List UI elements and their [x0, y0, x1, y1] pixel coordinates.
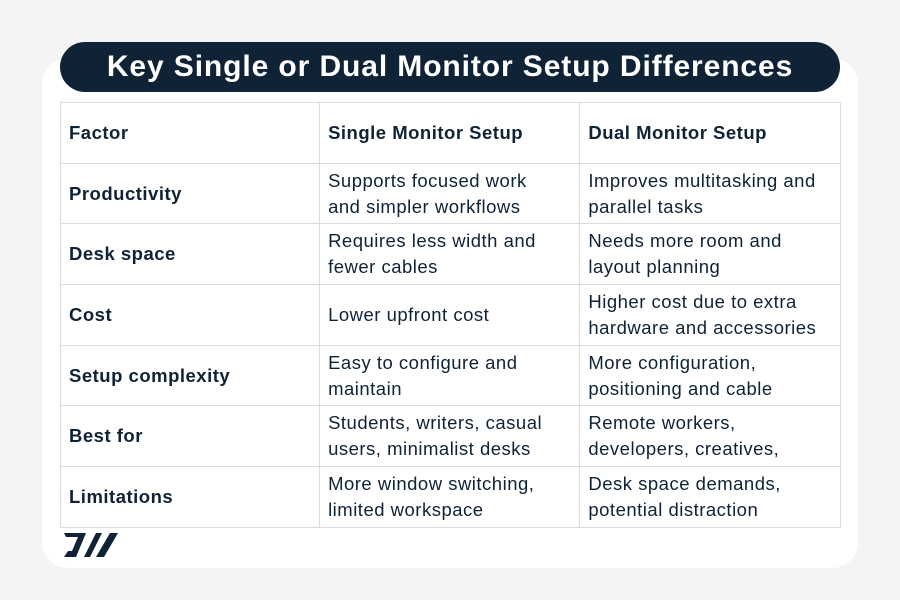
comparison table: and simpler workflows — [328, 196, 521, 217]
comparison table: Higher cost due to extra — [588, 291, 797, 312]
comparison table: parallel tasks — [588, 196, 703, 217]
icon: logo — [64, 533, 118, 557]
comparison table: hardware and accessories — [588, 317, 816, 338]
comparison table: Supports focused work — [328, 170, 527, 191]
comparison table: Dual Monitor Setup — [588, 122, 767, 143]
comparison table: Requires less width and — [328, 230, 536, 251]
comparison table: Easy to configure and — [328, 352, 518, 373]
comparison table: Best for — [69, 425, 143, 446]
comparison table: developers, creatives, — [588, 438, 779, 459]
comparison table: Lower upfront cost — [328, 304, 489, 325]
comparison table: Cost — [69, 304, 112, 325]
comparison table: Remote workers, — [588, 412, 736, 433]
comparison table: Improves multitasking and — [588, 170, 816, 191]
comparison table: limited workspace — [328, 499, 484, 520]
comparison table: Setup complexity — [69, 365, 230, 386]
comparison table: Productivity — [69, 183, 182, 204]
comparison table: More configuration, — [588, 352, 756, 373]
comparison table: maintain — [328, 378, 402, 399]
comparison table: More window switching, — [328, 473, 534, 494]
card background — [42, 58, 858, 568]
comparison table: Limitations — [69, 486, 173, 507]
title: Key Single or Dual Monitor Setup Differences — [107, 50, 793, 83]
title — [60, 42, 840, 92]
comparison table: Needs more room and — [588, 230, 782, 251]
comparison table — [60, 102, 841, 528]
comparison table: positioning and cable — [588, 378, 773, 399]
comparison table: potential distraction — [588, 499, 758, 520]
comparison table: Desk space demands, — [588, 473, 781, 494]
comparison table: fewer cables — [328, 256, 438, 277]
comparison table: Single Monitor Setup — [328, 122, 523, 143]
comparison table: Students, writers, casual — [328, 412, 542, 433]
comparison table: Factor — [69, 122, 129, 143]
comparison table: Desk space — [69, 243, 176, 264]
comparison table: layout planning — [588, 256, 720, 277]
comparison table: users, minimalist desks — [328, 438, 531, 459]
